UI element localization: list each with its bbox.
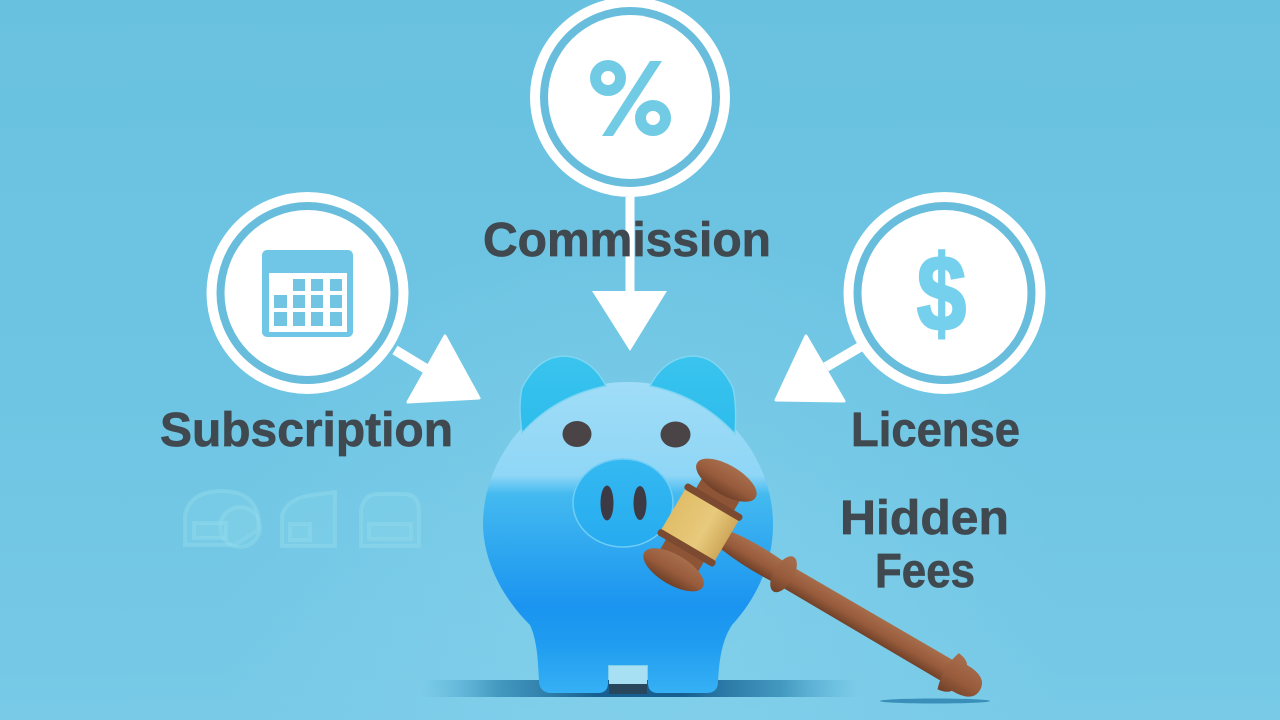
- gavel handle rings: [765, 552, 802, 597]
- faded icons row: [185, 491, 419, 547]
- heading: Hidden Fees: Hidden: [840, 492, 1009, 545]
- gavel handle: [719, 530, 961, 686]
- pig ear: left: [520, 356, 606, 433]
- pig body: [483, 382, 773, 693]
- icon: subscription calendar badge: [212, 197, 404, 389]
- icon: license dollar badge: [848, 197, 1040, 389]
- pig eyes: [562, 421, 690, 448]
- arrow: commission to piggy bank: [592, 197, 667, 351]
- heading: Hidden Fees: Fees: [875, 545, 975, 598]
- heading: Subscription: Subscription: [160, 404, 453, 457]
- icon: license dollar badge: $: [917, 233, 966, 353]
- piggy bank: [483, 356, 773, 694]
- gap between legs: [609, 666, 647, 684]
- gavel head: [637, 450, 763, 600]
- arrow: subscription to piggy bank: [395, 336, 479, 402]
- pig snout: [573, 459, 673, 547]
- heading: Commission: Commission: [483, 214, 771, 267]
- heading: Hidden Fees: [840, 492, 1009, 598]
- gavel handle end knob: [934, 651, 991, 708]
- icon: commission percent badge: [535, 2, 725, 192]
- arrow: license to piggy bank: [776, 336, 860, 401]
- heading: License: License: [851, 404, 1020, 457]
- ground shadow: [420, 680, 990, 704]
- pig ear: right: [650, 356, 736, 434]
- gavel: [637, 450, 1014, 720]
